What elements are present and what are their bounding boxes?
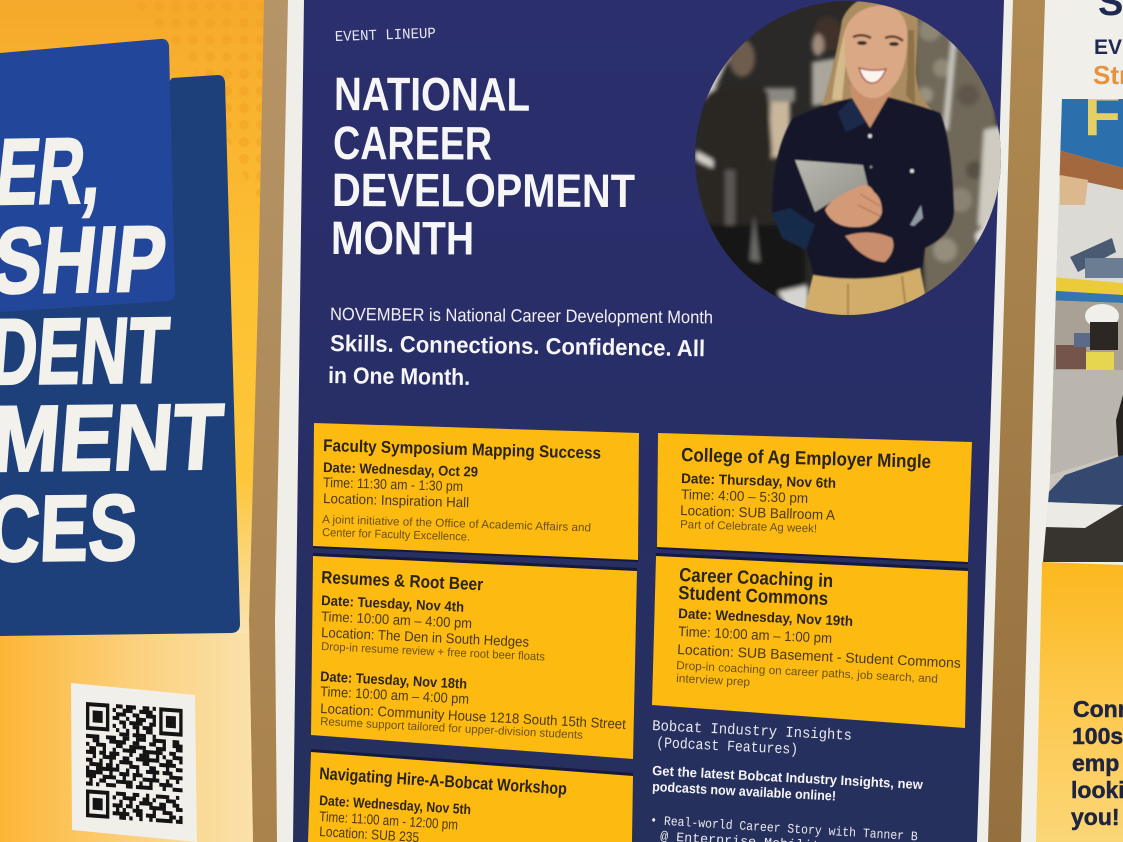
lower hand <box>845 232 893 262</box>
card details: Location: Inspiration Hall <box>323 490 469 510</box>
smile <box>859 68 886 83</box>
center poster paper <box>275 0 1013 842</box>
podcast intro: Get the latest Bobcat Industry Insights, new <box>652 763 924 792</box>
tablet <box>795 160 868 212</box>
podcast section <box>650 718 924 842</box>
right poster heading <box>1093 0 1123 90</box>
right poster callout: 100s <box>1072 723 1123 749</box>
podcast heading <box>652 718 852 759</box>
blue backing shape <box>0 75 240 636</box>
title <box>331 67 635 264</box>
card heading: Student Commons <box>678 583 829 610</box>
card details <box>320 592 626 742</box>
card heading: College of Ag Employer Mingle <box>681 445 931 473</box>
right poster callout: emp <box>1072 750 1119 776</box>
card heading: Navigating Hire-A-Bobcat Workshop <box>319 764 567 799</box>
card heading: Career Coaching in <box>679 565 834 592</box>
podcast intro: podcasts now available online! <box>652 779 836 804</box>
card details: Date: Wednesday, Nov 5th <box>319 792 472 817</box>
card details: Date: Tuesday, Nov 18th <box>320 668 467 692</box>
pants <box>802 268 926 320</box>
left poster <box>0 0 265 842</box>
card heading: Faculty Symposium Mapping Success <box>323 436 601 463</box>
blurred office background <box>914 16 998 294</box>
right poster callout <box>1071 696 1123 830</box>
QR code panel <box>71 683 197 842</box>
intro text: Skills. Connections. Confidence. All <box>330 330 705 361</box>
event lineup label: EVENT LINEUP <box>335 25 436 46</box>
podcast heading: Bobcat Industry Insights <box>652 718 852 745</box>
face <box>844 5 907 98</box>
title: NATIONAL <box>334 67 530 121</box>
card details: Drop-in resume review + free root beer floats <box>321 641 545 664</box>
card details: Date: Wednesday, Oct 29 <box>323 459 479 480</box>
event card: Career Coaching in Student Commons <box>652 553 968 728</box>
card details: Time: 11:30 am - 1:30 pm <box>323 474 463 494</box>
right poster photo collage <box>1040 81 1123 565</box>
card details <box>319 792 472 842</box>
card details: Location: SUB Ballroom A <box>680 502 836 523</box>
card details: interview prep <box>676 673 750 689</box>
blue front shape <box>0 39 175 312</box>
card details: Center for Faculty Excellence. <box>322 527 470 544</box>
intro text <box>328 304 713 390</box>
right poster <box>1021 0 1123 842</box>
QR code <box>86 704 183 822</box>
intro text: in One Month. <box>328 362 470 390</box>
card details: Time: 11:00 am - 12:00 pm <box>319 808 459 832</box>
card details: Drop-in coaching on career paths, job search, and <box>676 660 938 686</box>
card details: A joint initiative of the Office of Academic Affairs and <box>322 514 591 534</box>
card details: Location: SUB Basement - Student Commons <box>677 641 961 671</box>
title: MONTH <box>331 211 474 264</box>
shirt collar <box>838 98 866 132</box>
right poster yellow panel <box>1036 562 1123 842</box>
card details: Date: Wednesday, Nov 19th <box>678 605 853 629</box>
center poster navy background <box>293 0 1004 842</box>
intro text: NOVEMBER is National Career Development Month <box>330 304 713 327</box>
card details: Time: 4:00 – 5:30 pm <box>681 486 808 506</box>
hair <box>822 0 932 118</box>
card details: Location: Community House 1218 South 15th Street <box>320 700 626 732</box>
card details <box>322 459 591 544</box>
title: DEVELOPMENT <box>332 163 635 217</box>
podcast heading: (Podcast Features) <box>656 735 798 759</box>
card details: Part of Celebrate Ag week! <box>680 519 817 535</box>
upper hand <box>825 185 882 227</box>
brows and eyes <box>853 35 903 41</box>
card details: Resume support tailored for upper-division students <box>320 716 583 742</box>
title: CAREER <box>333 116 492 170</box>
card details: Time: 10:00 am – 4:00 pm <box>321 608 472 631</box>
card details: Date: Tuesday, Nov 4th <box>321 592 464 615</box>
card heading: Resumes & Root Beer <box>321 567 484 594</box>
right poster heading: EV <box>1094 36 1122 59</box>
card details: Time: 10:00 am – 1:00 pm <box>678 623 832 646</box>
card details <box>676 605 961 689</box>
card details: Time: 10:00 am – 4:00 pm <box>320 683 469 707</box>
card details <box>680 470 836 535</box>
shirt <box>772 97 954 280</box>
card heading <box>678 565 834 610</box>
left poster headline <box>0 119 226 581</box>
shirt buttons and pocket <box>868 134 872 138</box>
right poster callout: you! <box>1071 804 1120 830</box>
neck <box>850 85 892 130</box>
event card: Resumes and Root Beer <box>311 553 637 759</box>
card details: Date: Thursday, Nov 6th <box>681 470 836 491</box>
event card: Navigating Hire-A-Bobcat Workshop <box>308 749 633 842</box>
circular photo of smiling woman holding a tablet <box>690 0 1010 320</box>
event card: Faculty Symposium <box>313 423 639 562</box>
card details: Location: The Den in South Hedges <box>321 624 529 650</box>
event card: College of Ag Employer Mingle <box>657 433 972 564</box>
